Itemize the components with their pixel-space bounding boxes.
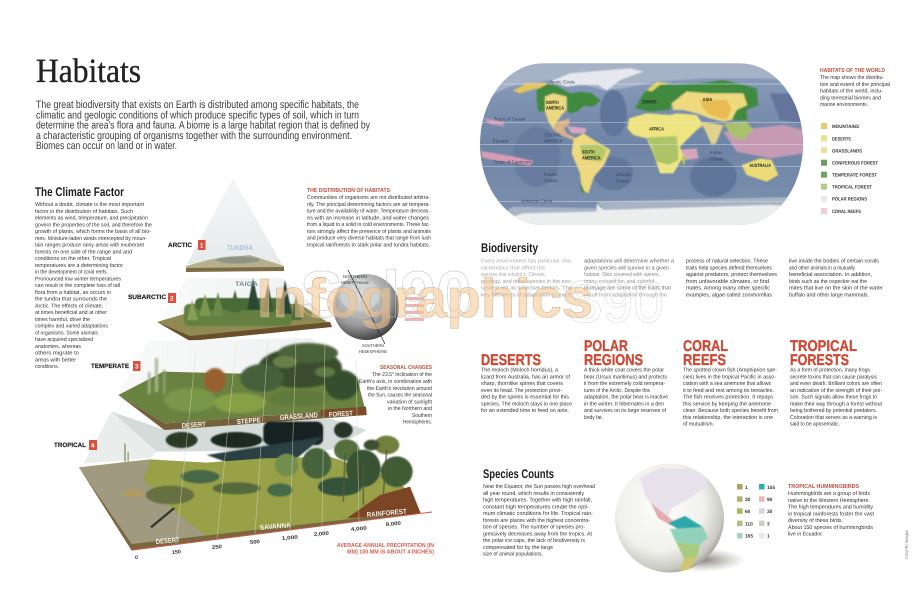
panel: coral reefs: REEFS: [683, 352, 726, 369]
earth tilt diagram: [333, 270, 424, 354]
text block: species counts: Near the Equator, the Sun passes high overhead: [483, 484, 595, 490]
panel: coral reefs: The spotted clown fish (Amphiprion spe-: [683, 368, 777, 374]
text block: biodiversity: and other animals in a mutually: [789, 265, 855, 271]
label: subarctic: [128, 293, 176, 303]
text block: species counts: size of animal populations.: [483, 552, 543, 558]
text block: species counts: the polar ice caps, the lack of biodiversity is: [483, 538, 585, 544]
panel: polar regions: [584, 338, 668, 421]
panel: polar regions: body fat.: [584, 415, 603, 421]
earth tilt diagram: SOUTHERN: [362, 343, 384, 348]
text block: the climate factor: flora from a habitat, as occurs in: [35, 290, 111, 296]
earth tilt diagram: HEMISPHERE: [359, 349, 387, 354]
precipitation axis: 4,000: [351, 526, 367, 533]
text block: seasonal changes: Hemispheres.: [403, 420, 432, 426]
panel: polar regions: in the winter. It hibernates in a den: [584, 401, 664, 407]
text block: seasonal changes: the Sun, causes the seasonal: [368, 392, 432, 398]
earth tilt diagram: HEMISPHERE: [341, 280, 369, 285]
watermark: S90: [566, 268, 664, 335]
text block: the climate factor: areas with better: [35, 357, 76, 363]
intro text block: The great biodiversity that exists on Earth is distributed among specific habitats, the: [36, 99, 359, 111]
layer: tropical: [79, 412, 421, 551]
text block: habitats of the world: [820, 67, 890, 108]
text block: biodiversity: habitat. Skin covered with spines,: [584, 272, 660, 278]
map labels: [493, 79, 771, 204]
panel: tropical forests: FORESTS: [790, 352, 849, 369]
world map: [480, 63, 803, 227]
text block: tropical hummingbirds: diversity of these birds.: [788, 518, 843, 524]
panel: tropical forests: son. Such signals allow these frogs to: [790, 395, 877, 401]
label: tropical: TROPICAL: [54, 442, 86, 449]
text block: species counts: constant high temperatures create the opti-: [483, 504, 589, 510]
text block: the climate factor: can result in the complete loss of tall: [35, 283, 120, 289]
panel: coral reefs: clean. Because both species benefit from: [683, 408, 778, 414]
layer: arctic: TUNDRA: [227, 245, 253, 252]
map legend: POLAR REGIONS: [832, 197, 868, 203]
precipitation axis: 500: [250, 539, 260, 546]
panel: deserts: ded by the spines is essential for this: [481, 395, 569, 401]
text block: precipitation caption: [337, 542, 434, 556]
image credit: ©Sol 90 Images: [904, 530, 909, 559]
text block: habitats of the world: tion and extent of the principal: [820, 82, 890, 88]
text block: seasonal changes: in the Northern and: [388, 406, 432, 412]
text block: biodiversity: plumage are some of the traits that: [584, 286, 671, 292]
text block: the climate factor: forests on one side of the range and arid: [35, 249, 132, 255]
text block: tropical hummingbirds: The high temperatures and humidity: [788, 504, 873, 510]
title: Habitats: [36, 53, 141, 90]
label: temperate: 3: [135, 364, 139, 370]
text block: the climate factor: of organisms. Some animals: [35, 330, 98, 336]
map labels: Ocean: [616, 178, 630, 183]
species count legend: 155: [767, 485, 775, 491]
text block: the climate factor: at times beneficial and at other: [35, 310, 107, 316]
text block: biodiversity: beneficial association. In addition,: [789, 272, 872, 278]
watermark: Sol90: [300, 257, 472, 331]
map labels: NORTH: [546, 100, 559, 105]
precipitation axis: 8,000: [386, 521, 401, 528]
panel: deserts: for an extended time to feed on ants.: [481, 408, 569, 414]
text block: tropical hummingbirds: About 150 species of hummingbirds: [788, 525, 873, 531]
species globe: [615, 464, 746, 572]
map labels: Arctic Circle: [550, 79, 575, 85]
map labels: AMERICA: [582, 155, 601, 161]
text block: distribution of habitats: rily. The principal determining factors are air tempera-: [307, 202, 430, 208]
habitat pyramid diagram: [54, 178, 432, 561]
text block: habitats of the world: The map shows the distribu-: [820, 75, 884, 81]
text block: the climate factor: conditions.: [35, 364, 59, 370]
text block: biodiversity: birds such as the oxpecker eat the: [789, 279, 867, 285]
species count legend: 110: [745, 521, 753, 527]
text block: seasonal changes: [359, 364, 432, 426]
species count legend: 30: [745, 497, 751, 503]
panel: deserts: DESERTS: [481, 352, 541, 369]
panel: coral reefs: of mutualism.: [683, 422, 714, 428]
panel: tropical forests: and even death. Brilliant colors are often: [790, 381, 882, 387]
text block: biodiversity: [481, 258, 883, 298]
panel: deserts: The moloch (Moloch horridus), a: [481, 368, 559, 374]
text block: species counts: compensated for by the large: [483, 545, 553, 551]
precipitation axis: 1,000: [282, 535, 298, 542]
text block: the climate factor: times harmful, drive the: [35, 317, 90, 323]
precipitation axis: RAINFOREST: [367, 508, 408, 519]
map labels: AMERICA: [544, 138, 563, 143]
text block: habitats of the world: ding terrestrial biomes and: [820, 95, 881, 101]
text block: seasonal changes: Southern: [412, 413, 432, 419]
text block: habitats of the world: HABITATS OF THE WORLD: [820, 67, 885, 74]
text block: the climate factor: anatomies, whereas: [35, 344, 81, 350]
panel: tropical forests: [790, 338, 882, 428]
text block: the climate factor: have acquired specialized: [35, 337, 93, 343]
map labels: Equator: [493, 138, 508, 144]
text block: the climate factor: govern the properties of the soil, and therefore the: [35, 222, 152, 228]
layer: temperate: [118, 338, 367, 431]
text block: biodiversity: given species will survive in a given: [584, 265, 669, 271]
map labels: CENTRAL: [544, 132, 562, 138]
layer: temperate: GRASSLAND: [280, 412, 318, 422]
map labels: AFRICA: [649, 126, 664, 132]
panel: polar regions: A thick white coat covers the polar: [584, 368, 664, 374]
panel: polar regions: and survives on its large reserves of: [584, 408, 666, 414]
text block: the climate factor: complex and varied adaptations: [35, 324, 108, 330]
map legend: TEMPERATE FOREST: [832, 173, 877, 179]
species count legend: [737, 484, 775, 540]
map labels: Ocean: [710, 156, 724, 161]
panel: polar regions: tures of the Arctic. Despite this: [584, 388, 650, 394]
panel: coral reefs: this service by keeping the anemone: [683, 401, 771, 407]
map labels: AMERICA: [546, 105, 564, 111]
text block: biodiversity: Every environment has particular cha-: [481, 258, 572, 264]
heading: biodiversity: Biodiversity: [481, 241, 538, 255]
text block: species counts: high temperatures. Together with high rainfall,: [483, 498, 592, 504]
text block: species counts: all year round, which results in consistently: [483, 491, 584, 497]
text block: the climate factor: growth of plants, which forms the basis of all bio-: [35, 229, 151, 235]
map labels: AUSTRALIA: [749, 163, 771, 168]
layer: temperate: DESERT: [182, 421, 207, 430]
precipitation axis: 250: [212, 544, 222, 551]
panel: tropical forests: Coloration that serves as a warning is: [790, 415, 877, 421]
watermark: [257, 257, 664, 335]
text block: tropical hummingbirds: [788, 483, 874, 538]
panel: tropical forests: being bothered by potential predators.: [790, 408, 877, 414]
layer: arctic: [186, 178, 284, 272]
map legend: MOUNTAINS: [832, 124, 860, 130]
text block: biodiversity: many-colored fur, and colorful: [584, 279, 654, 285]
label: temperate: TEMPERATE: [91, 363, 130, 370]
label: subarctic: 2: [170, 296, 174, 302]
intro text block: determine the area's flora and fauna. A biome is a large habitat region that is defined by: [36, 120, 370, 132]
species count legend: 165: [745, 534, 753, 540]
text block: tropical hummingbirds: live in Ecuador.: [788, 532, 823, 538]
text block: biodiversity: from unfavorable climates, or find: [686, 279, 769, 285]
label: subarctic: SUBARCTIC: [128, 294, 166, 301]
text block: the climate factor: tain ranges produce rainy areas with exuberant: [35, 242, 144, 248]
intro text block: [36, 99, 370, 152]
text block: biodiversity: buffalo and other large mammals.: [789, 292, 869, 298]
text block: the climate factor: elements as wind, temperature, and precipitation: [35, 216, 148, 222]
text block: the climate factor: Arctic. The effects of climate,: [35, 303, 103, 309]
text block: biodiversity: result from adaptation through the: [584, 292, 667, 298]
text block: the climate factor: Pronounced low winter temperatures: [35, 276, 121, 282]
panel: polar regions: POLAR: [584, 338, 628, 355]
species count legend: 60: [745, 509, 751, 515]
panel: coral reefs: CORAL: [683, 338, 728, 355]
earth tilt diagram: NORTHERN: [343, 274, 367, 279]
label: tropical: [54, 440, 97, 450]
precipitation axis: 2,000: [314, 531, 329, 538]
intro text block: a characteristic grouping of organisms together with the surrounding environment.: [36, 130, 352, 142]
text block: distribution of habitats: THE DISTRIBUTION OF HABITATS: [307, 187, 390, 194]
precipitation axis: [132, 340, 432, 561]
text block: distribution of habitats: tors strongly affect the presence of plants and animals: [307, 229, 431, 235]
text block: species counts: tion of species. The number of species pro-: [483, 524, 585, 530]
text block: precipitation caption: MM) 100 MM IS ABOUT 4 INCHES): [347, 548, 434, 556]
precipitation axis: SAVANNA: [260, 522, 291, 532]
map labels: ASIA: [703, 97, 712, 102]
map labels: Indian: [710, 150, 723, 155]
panel: deserts: even its head. The protection provi-: [481, 388, 562, 394]
panel: tropical forests: As a form of protection, many frogs: [790, 368, 870, 374]
text block: distribution of habitats: and produce very diverse habitats that range from lush: [307, 236, 431, 242]
text block: seasonal changes: The 23.5° inclination of the: [372, 372, 432, 378]
text block: distribution of habitats: ture and the availability of water. Temperature decreas-: [307, 208, 430, 214]
panel: coral reefs: The fish receives protection. It repays: [683, 395, 773, 401]
text block: biodiversity: process of natural selection. These: [686, 258, 768, 264]
panel: coral reefs: cies) lives in the tropical Pacific in asso-: [683, 374, 776, 380]
text block: the climate factor: [35, 202, 152, 370]
text block: the climate factor: temperatures are a determining factor: [35, 263, 123, 269]
species count legend: 3: [767, 521, 770, 527]
label: temperate: [91, 361, 140, 371]
panel: tropical forests: make their way through a forest without: [790, 401, 882, 407]
intro text block: climatic and geologic conditions of which produce specific types of soil, which in turn: [36, 109, 359, 121]
layer: temperate: FOREST: [329, 410, 354, 419]
layer: temperate: STEPPE: [237, 417, 261, 426]
panel: deserts: lizard from Australia, has an armor of: [481, 374, 570, 380]
text block: distribution of habitats: es with an increase in latitude, and water changes: [307, 215, 429, 221]
panel: deserts: sharp, thornlike spines that covers: [481, 381, 563, 387]
panel: polar regions: bear (Ursus maritimus) and protects: [584, 374, 667, 380]
text block: biodiversity: live inside the bodies of certain corals: [789, 258, 879, 264]
text block: biodiversity: geology, and other species in the eco-: [481, 279, 572, 285]
text block: species counts: [483, 484, 595, 558]
species count legend: 30: [767, 509, 773, 515]
panel: deserts: species. The moloch stays in one place: [481, 401, 572, 407]
map legend: GRASSLANDS: [832, 148, 863, 154]
map legend: CONIFEROUS FOREST: [832, 161, 878, 167]
label: tropical: 4: [91, 442, 95, 450]
text block: the climate factor: Without a doubt, climate is the most important: [35, 202, 144, 208]
text block: biodiversity: mites that live on the skin of the water: [789, 286, 883, 292]
map labels: Tropic of Cancer: [494, 116, 526, 122]
text block: biodiversity: key elements of adaptation to each: [481, 292, 571, 298]
label: arctic: 1: [200, 242, 204, 250]
map labels: SOUTH: [582, 149, 595, 155]
heading: the climate factor: The Climate Factor: [35, 185, 124, 199]
text block: distribution of habitats: from a liquid to a solid in cold environments. These fac-: [307, 222, 430, 228]
text block: tropical hummingbirds: TROPICAL HUMMINGBIRDS: [788, 483, 859, 490]
heading: species counts: Species Counts: [483, 467, 554, 481]
species count legend: 1: [767, 534, 770, 540]
panel: polar regions: it from the extremely cold tempera-: [584, 381, 665, 387]
text block: seasonal changes: SEASONAL CHANGES: [380, 364, 432, 371]
precipitation axis: 150: [172, 549, 181, 556]
text block: biodiversity: species that inhabit it. Climate,: [481, 272, 546, 278]
text block: habitats of the world: habitats of the world, inclu-: [820, 88, 883, 94]
text block: biodiversity: against predators, protect themselves: [686, 272, 777, 278]
text block: the climate factor: mes. Moisture-laden winds intercepted by moun-: [35, 236, 147, 242]
panel: polar regions: adaptation, the polar bear is inactive: [584, 395, 668, 401]
intro text block: Biomes can occur on land or in water.: [36, 140, 177, 152]
map labels: Antarctic Circle: [521, 198, 552, 204]
map legend: CORAL REEFS: [832, 209, 862, 215]
text block: species counts: gressively decreases away from the tropics. At: [483, 531, 592, 537]
text block: distribution of habitats: [307, 187, 431, 248]
text block: the climate factor: the tundra that surrounds the: [35, 296, 107, 302]
text block: habitats of the world: marine environments.: [820, 102, 868, 108]
panel: deserts: [481, 352, 572, 414]
panel: tropical forests: secrete toxins that can cause paralysis: [790, 374, 877, 380]
panel: coral reefs: this relationship, the interaction is one: [683, 415, 773, 421]
text block: distribution of habitats: tropical rainforests to stark polar and tundra habitats.: [307, 242, 430, 248]
panel: polar regions: REGIONS: [584, 352, 643, 369]
text block: biodiversity: examples, algae called zooxhorellas: [686, 292, 772, 298]
text block: seasonal changes: variation of sunlight: [387, 399, 432, 405]
map labels: Tropic of Capricorn: [493, 159, 531, 165]
text block: biodiversity: system act as selective factors. The: [481, 286, 572, 292]
precipitation axis: DESERT: [156, 537, 181, 546]
panel: coral reefs: [683, 338, 778, 428]
label: arctic: [168, 240, 206, 250]
text block: the climate factor: in the development of coral reefs.: [35, 270, 108, 276]
text block: the climate factor: conditions on the other. Tropical: [35, 256, 111, 262]
text block: biodiversity: mates. Among many other specific: [686, 286, 770, 292]
map labels: EUROPE: [642, 99, 657, 105]
text block: species counts: mum climatic conditions for life. Tropical rain-: [483, 511, 593, 517]
text block: the climate factor: others migrate to: [35, 350, 79, 356]
watermark: Infographics: [257, 267, 593, 329]
layer: subarctic: [157, 278, 335, 341]
text block: tropical hummingbirds: Hummingbirds are a group of birds: [788, 491, 870, 497]
map labels: Atlantic: [616, 172, 631, 177]
species count legend: 1: [745, 485, 748, 491]
map labels: Pacific: [544, 172, 558, 177]
label: arctic: ARCTIC: [168, 242, 192, 249]
text block: seasonal changes: the Earth's revolution around: [367, 386, 432, 392]
map labels: Ocean: [544, 178, 558, 183]
text block: biodiversity: racteristics that affect the: [481, 265, 545, 271]
text block: tropical hummingbirds: native to the Western Hemisphere.: [788, 498, 870, 504]
layer: subarctic: TAIGA: [235, 281, 258, 288]
text block: seasonal changes: Earth's axis, in combination with: [359, 379, 432, 385]
text block: species counts: forests are places with the highest concentra-: [483, 518, 590, 524]
text block: precipitation caption: AVERAGE ANNUAL PRECIPITATION (IN: [337, 542, 434, 549]
species count legend: 90: [767, 497, 773, 503]
text block: distribution of habitats: Communities of organisms are not distributed arbitra-: [307, 195, 430, 201]
map legend: TROPICAL FOREST: [832, 185, 872, 191]
panel: tropical forests: an indication of the strength of their poi-: [790, 388, 882, 394]
text block: biodiversity: traits help species defend themselves: [686, 265, 772, 271]
map legend: [821, 123, 878, 215]
precipitation axis: 0: [135, 555, 138, 561]
map legend: DESERTS: [832, 136, 852, 142]
panel: tropical forests: said to be aposematic.: [790, 422, 840, 428]
text block: the climate factor: factor in the distribution of habitats. Such: [35, 209, 133, 215]
panel: tropical forests: TROPICAL: [790, 338, 857, 355]
text block: biodiversity: adaptations will determine whether a: [584, 258, 675, 264]
text block: tropical hummingbirds: in tropical rainforests foster the vast: [788, 511, 874, 517]
panel: coral reefs: ciation with a sea anemone that allows: [683, 381, 771, 387]
panel: coral reefs: it to feed and rest among its tentacles.: [683, 388, 774, 394]
